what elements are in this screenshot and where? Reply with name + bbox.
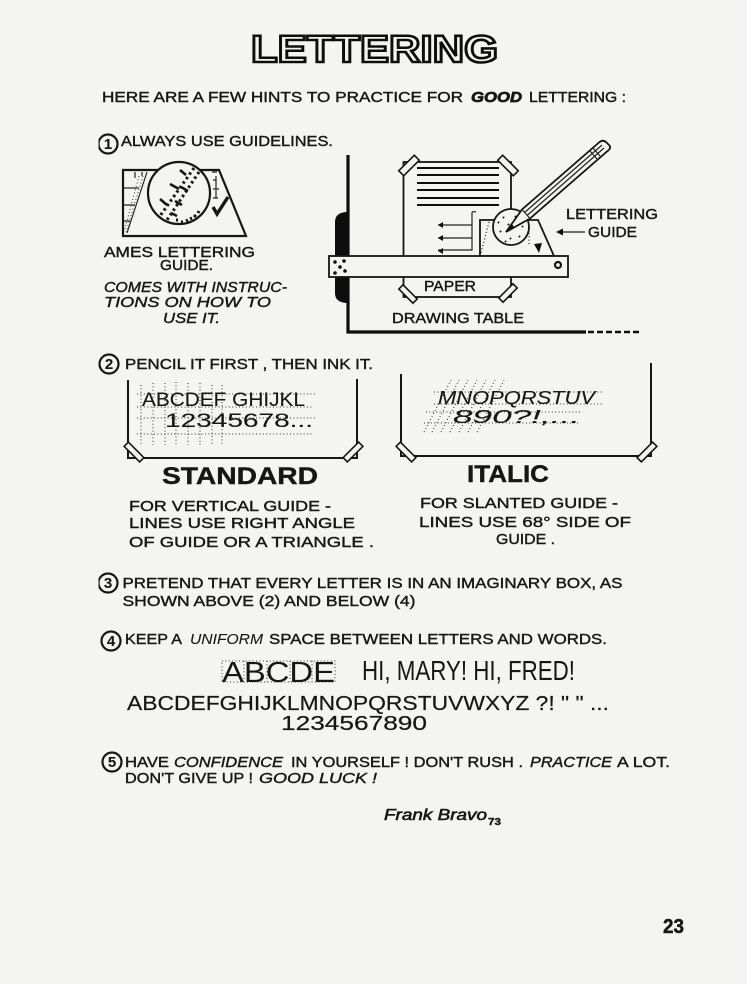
panel: standard sheet: ABCDEF GHIJKL xyxy=(142,390,305,411)
pencil xyxy=(506,141,610,232)
step 5: IN YOURSELF ! DON'T RUSH . xyxy=(291,754,523,771)
step 1 heading: ALWAYS USE GUIDELINES. xyxy=(121,133,333,150)
panel: italic sheet: 890?!,... xyxy=(453,407,580,427)
signature: Frank Bravo xyxy=(384,807,487,824)
step 4 xyxy=(102,631,607,650)
step 5: HAVE xyxy=(125,754,169,771)
label: drawing table: DRAWING TABLE xyxy=(392,310,524,327)
guide arrows xyxy=(438,212,476,254)
sample: numerals: 1234567890 xyxy=(281,713,427,735)
step 3: PRETEND THAT EVERY LETTER IS IN AN IMAGINARY BOX, AS xyxy=(122,575,622,592)
label: paper: PAPER xyxy=(424,278,476,295)
intro line: HERE ARE A FEW HINTS TO PRACTICE FOR xyxy=(102,89,463,106)
sample: boxed letters: ABCDE xyxy=(222,657,335,689)
step 3 xyxy=(98,574,622,610)
heading: standard: STANDARD xyxy=(162,463,318,490)
text: standard instructions: FOR VERTICAL GUIDE - xyxy=(129,498,331,515)
intro line xyxy=(102,89,626,106)
small lettering guide xyxy=(480,209,554,256)
signature xyxy=(384,807,502,828)
step 4: 4 xyxy=(107,633,116,650)
diagram: drawing table setup xyxy=(329,141,658,332)
signature: 73 xyxy=(488,817,502,828)
text: italic instructions: LINES USE 68° SIDE OF xyxy=(419,514,631,531)
step 5: 5 xyxy=(108,754,116,771)
caption: Ames lettering guide: GUIDE. xyxy=(160,257,213,274)
step 5 xyxy=(102,752,670,787)
text: standard instructions: LINES USE RIGHT ANGLE xyxy=(129,515,355,532)
caption: Ames lettering guide: TIONS ON HOW TO xyxy=(104,294,271,311)
step 5: PRACTICE xyxy=(530,754,613,771)
step 5: DON'T GIVE UP ! xyxy=(125,770,253,787)
step 3: SHOWN ABOVE (2) AND BELOW (4) xyxy=(122,593,416,610)
step 1 heading xyxy=(98,133,333,154)
step 4: UNIFORM xyxy=(190,631,264,648)
T-square xyxy=(329,256,568,277)
step 4: KEEP A xyxy=(125,631,182,648)
page number: 23 xyxy=(663,916,684,938)
drawing table edge xyxy=(335,155,642,332)
sample: alphabet: ABCDEFGHIJKLMNOPQRSTUVWXYZ ?! " " ... xyxy=(127,693,609,715)
text: italic instructions: FOR SLANTED GUIDE - xyxy=(420,495,618,512)
text: standard instructions: OF GUIDE OR A TRIANGLE . xyxy=(129,534,374,551)
paper sheet with tape xyxy=(399,155,518,303)
panel: italic sheet xyxy=(396,363,657,462)
intro line: LETTERING : xyxy=(529,89,626,106)
step 2 heading: PENCIL IT FIRST , THEN INK IT. xyxy=(125,356,373,373)
step 2 heading: 2 xyxy=(105,356,113,373)
caption: Ames lettering guide xyxy=(104,244,287,327)
step 5: GOOD LUCK ! xyxy=(259,770,378,787)
panel: standard sheet xyxy=(124,379,363,462)
step 3: 3 xyxy=(104,575,112,592)
step 5: CONFIDENCE xyxy=(174,754,284,771)
text: italic instructions: GUIDE . xyxy=(496,531,555,548)
title: LETTERING xyxy=(251,29,498,71)
step 5: A LOT. xyxy=(617,754,670,771)
step 4: SPACE BETWEEN LETTERS AND WORDS. xyxy=(269,631,607,648)
icon: Ames lettering guide xyxy=(123,162,246,236)
lettering samples xyxy=(127,655,609,735)
label: lettering guide with arrow: GUIDE xyxy=(588,224,637,241)
text: italic instructions xyxy=(419,495,631,548)
text: standard instructions xyxy=(129,498,374,551)
caption: Ames lettering guide: AMES LETTERING xyxy=(104,244,255,261)
label: lettering guide with arrow: LETTERING xyxy=(566,206,658,223)
sample: greeting: HI, MARY! HI, FRED! xyxy=(362,655,575,686)
heading: italic: ITALIC xyxy=(467,461,549,488)
caption: Ames lettering guide: COMES WITH INSTRUC- xyxy=(104,279,287,296)
caption: Ames lettering guide: USE IT. xyxy=(163,310,220,327)
intro line: GOOD xyxy=(471,89,522,106)
panel: standard sheet: 12345678... xyxy=(165,411,313,432)
step 1 heading: 1 xyxy=(104,136,112,153)
panel: italic sheet: MNOPQRSTUV xyxy=(438,388,597,408)
label: lettering guide with arrow xyxy=(556,206,658,241)
